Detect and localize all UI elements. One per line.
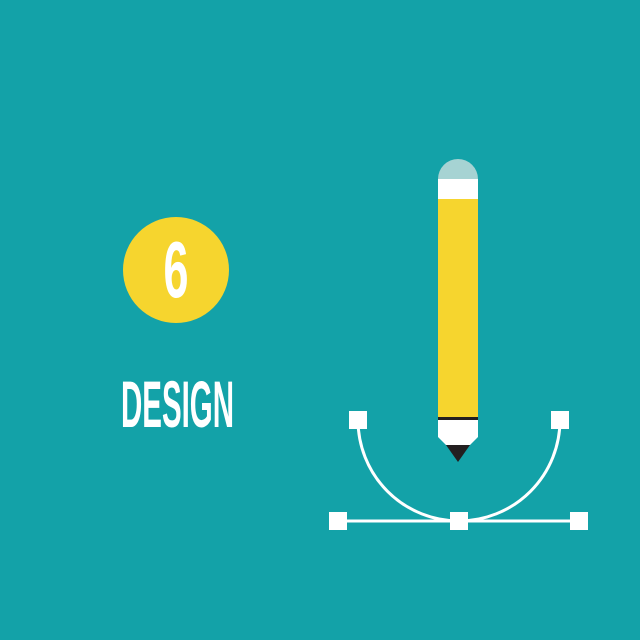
icon: bezier curve with handles — [329, 411, 588, 530]
number badge: 6 — [164, 225, 188, 314]
icon: pencil — [438, 159, 478, 462]
text: DESIGN — [121, 367, 234, 441]
number badge — [123, 217, 229, 323]
